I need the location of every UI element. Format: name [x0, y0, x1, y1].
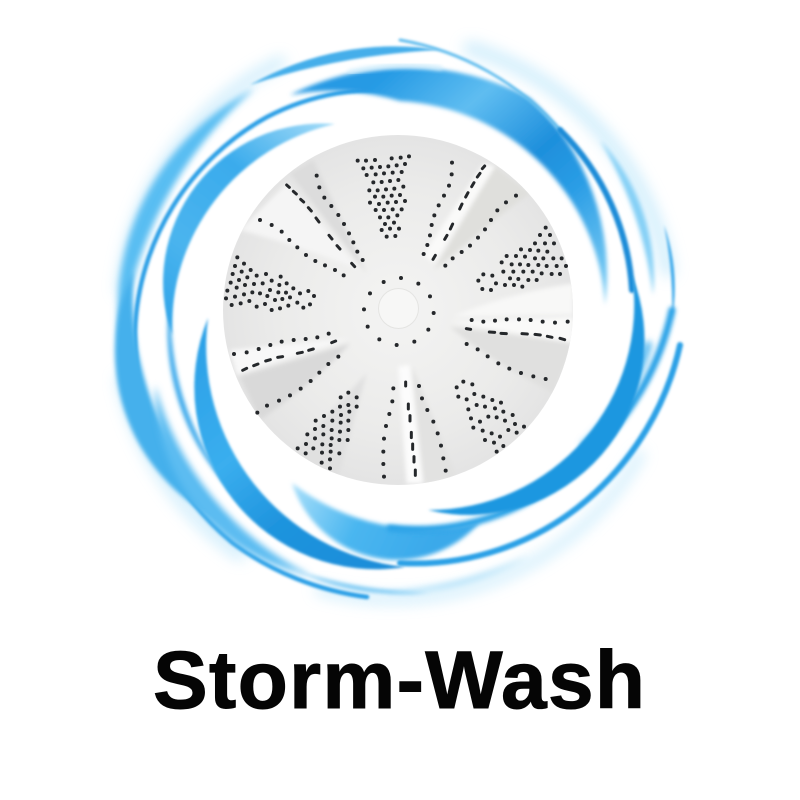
left outer thick band	[115, 270, 233, 527]
top right dark line	[560, 130, 632, 290]
disc base	[223, 135, 573, 485]
lower right outer streak	[400, 345, 680, 563]
central hub	[378, 288, 419, 329]
upper right vane shadow	[438, 172, 523, 265]
top left upper band	[250, 46, 440, 85]
left light streak	[155, 385, 310, 575]
lower right mid streak	[390, 310, 672, 529]
bottom light crescent	[292, 483, 480, 560]
swirl: blue water vortex	[115, 40, 680, 599]
top left dark line	[135, 90, 410, 597]
lower left vane highlight	[230, 342, 326, 374]
left inner streak	[168, 280, 240, 500]
lower right crescent	[428, 275, 645, 515]
slot holes	[243, 166, 565, 475]
top right light streak	[600, 140, 654, 295]
bottom vane highlight	[398, 365, 423, 483]
top left inner crescent	[163, 123, 335, 335]
right triangle sector highlight	[469, 284, 573, 316]
top band white streak	[350, 66, 440, 72]
left vane highlight	[240, 183, 360, 270]
right vane shadow	[455, 328, 542, 376]
perforation holes	[226, 156, 568, 477]
right outer streak	[664, 225, 675, 320]
washing machine pulsator disc	[223, 135, 573, 485]
upper left vane shadow	[290, 160, 367, 273]
upper left wash band	[118, 88, 255, 345]
right vane highlight	[450, 317, 573, 343]
bottom outer streak	[295, 570, 430, 594]
lower right wash	[585, 345, 648, 445]
bottom vane shadow	[414, 378, 435, 438]
round holes	[226, 156, 568, 477]
infographic canvas	[110, 36, 685, 710]
lower left crescent	[194, 318, 405, 569]
disc vane shading	[230, 160, 573, 483]
top right main band	[290, 67, 607, 305]
faint outer mist	[122, 48, 668, 599]
title: Storm-Wash	[153, 635, 645, 726]
upper right vane highlight	[426, 164, 494, 259]
bottom faint streak	[385, 555, 530, 592]
top right thin outer line	[400, 40, 560, 130]
lower left vane shadow	[240, 343, 350, 420]
lower left bottom sector	[283, 373, 367, 483]
